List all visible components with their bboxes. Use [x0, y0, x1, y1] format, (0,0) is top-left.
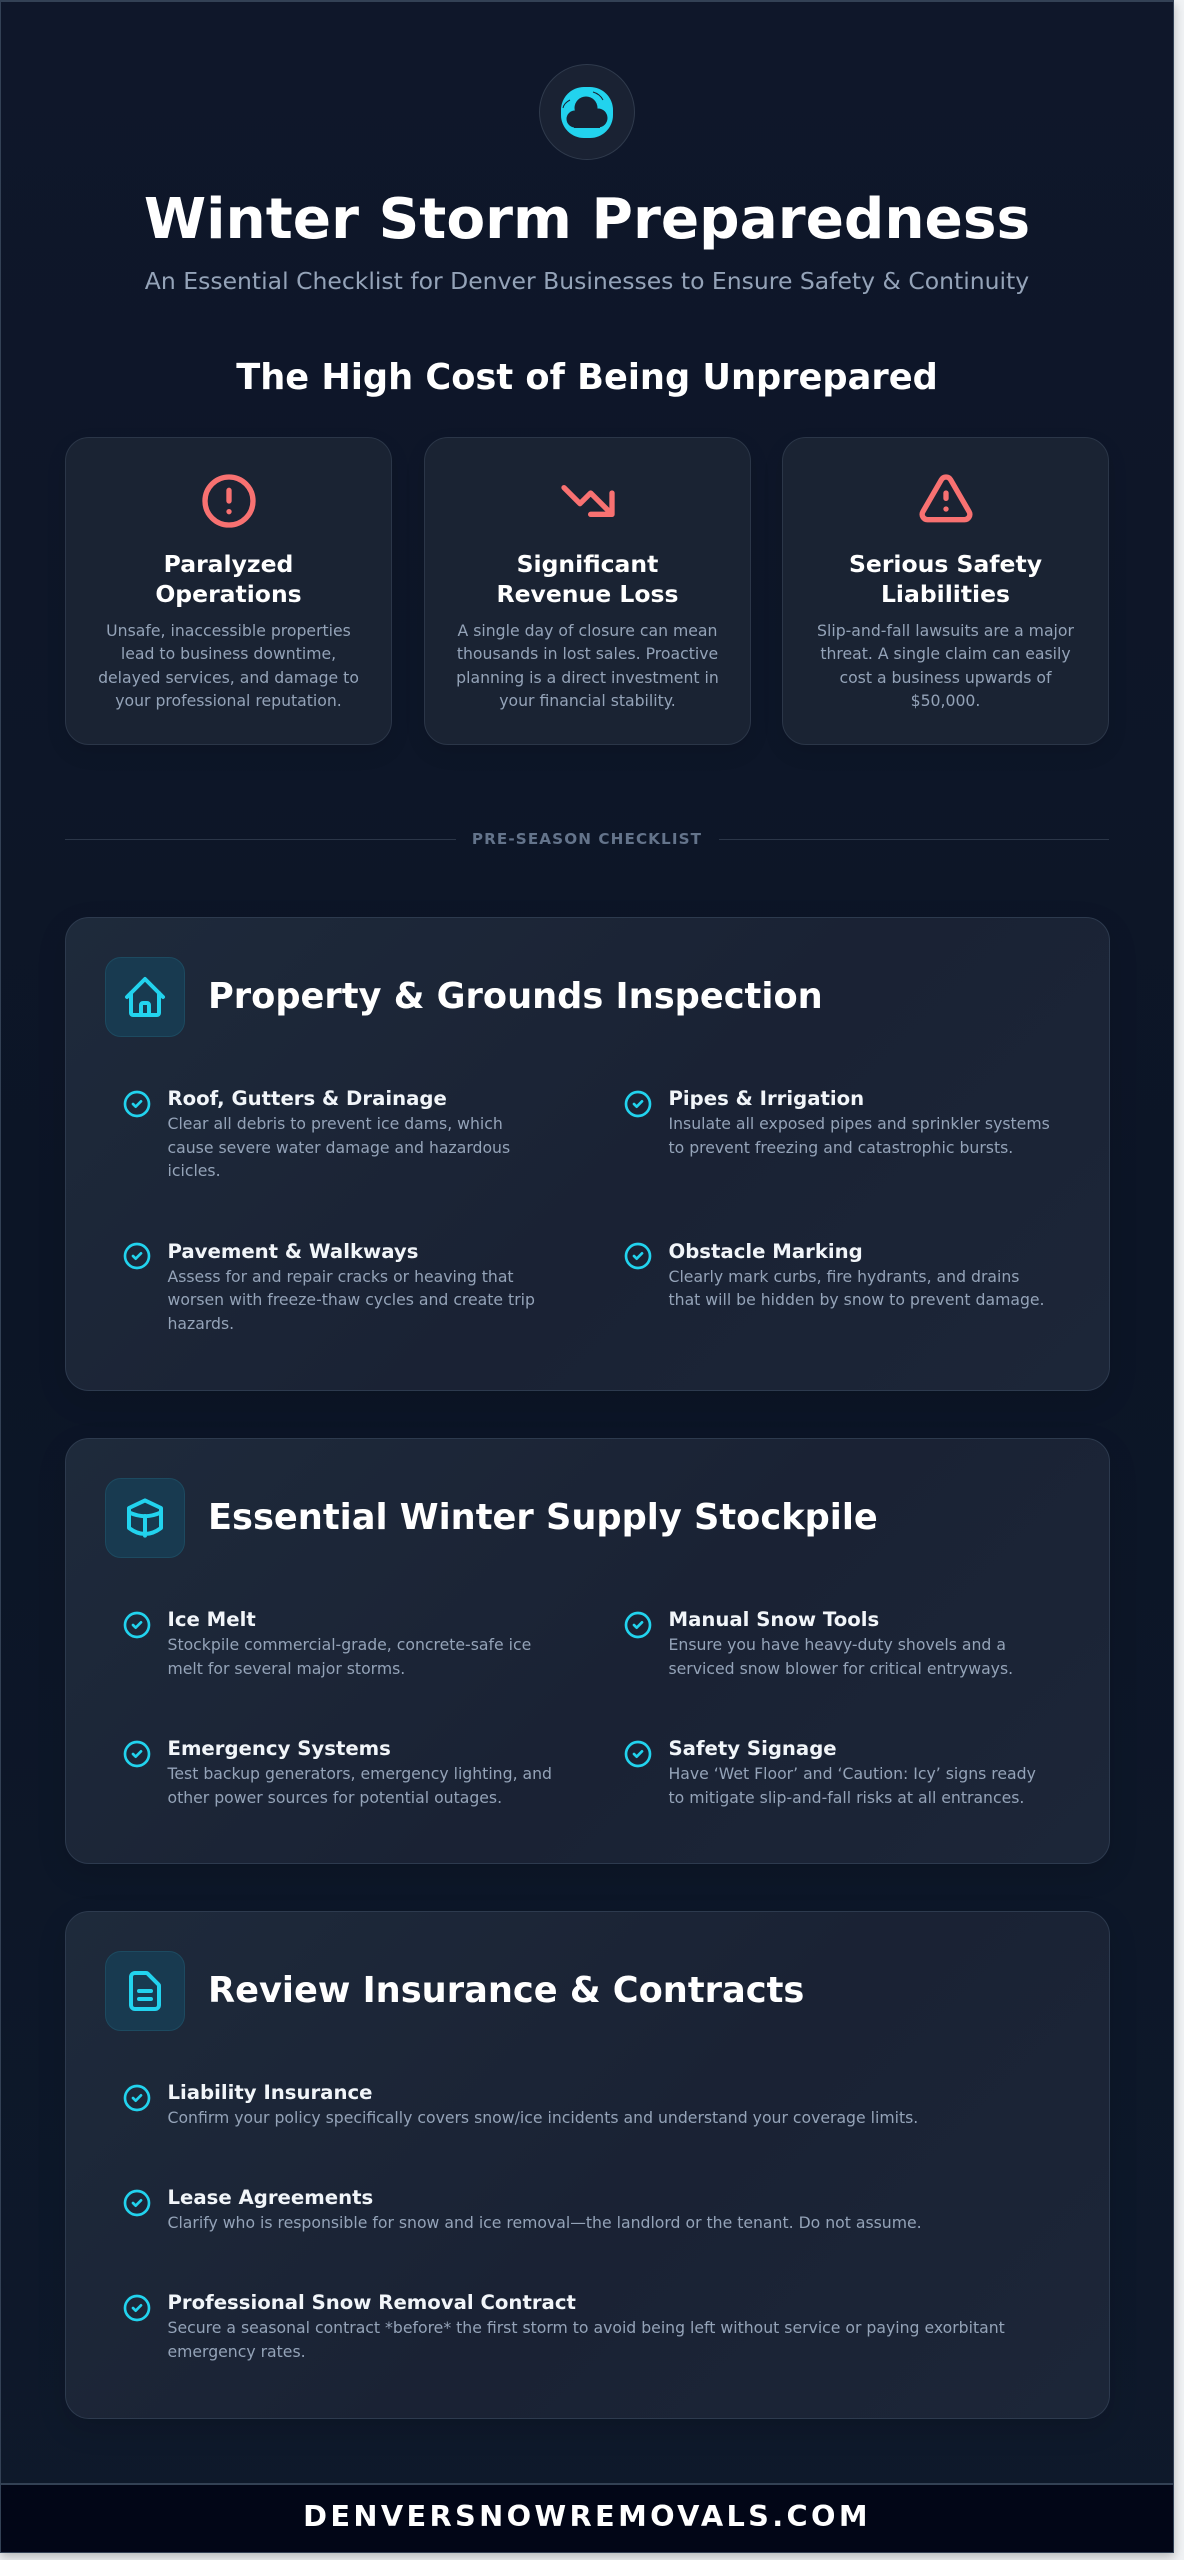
checklist item: Obstacle Marking — [668, 1240, 863, 1262]
checklist item: icicles. — [168, 1161, 221, 1180]
checklist item: that will be hidden by snow to prevent damage. — [668, 1290, 1045, 1309]
checklist item — [124, 2081, 918, 2127]
checklist item: Secure a seasonal contract *before* the first storm to avoid being left without service or paying exorbitant — [168, 2318, 1005, 2337]
card heading — [155, 550, 302, 608]
checklist item: melt for several major storms. — [168, 1659, 405, 1678]
checklist item — [624, 1608, 1013, 1678]
checklist item: cause severe water damage and hazardous — [168, 1138, 510, 1157]
card text: $50,000. — [911, 691, 980, 710]
icon: trending down — [561, 485, 615, 517]
checklist item: to prevent freezing and catastrophic bursts. — [668, 1138, 1013, 1157]
card text: planning is a direct investment in — [456, 668, 719, 687]
checklist item: Have ‘Wet Floor’ and ‘Caution: Icy’ signs ready — [668, 1764, 1036, 1783]
checklist item: Manual Snow Tools — [668, 1608, 879, 1631]
checklist item — [124, 2186, 922, 2232]
checklist item: Pipes & Irrigation — [668, 1087, 864, 1110]
checklist item: Safety Signage — [668, 1737, 837, 1760]
panel: safety liabilities — [782, 437, 1109, 745]
card heading: Operations — [155, 580, 302, 608]
checklist item: Emergency Systems — [168, 1737, 391, 1760]
checklist item: serviced snow blower for critical entryways. — [668, 1659, 1013, 1678]
card heading: Paralyzed — [164, 550, 293, 578]
card heading: Serious Safety — [849, 550, 1042, 578]
icon: document — [105, 1951, 185, 2031]
checklist item: Liability Insurance — [168, 2081, 372, 2104]
checklist item — [124, 2291, 1005, 2361]
icon: house — [105, 957, 185, 1037]
checklist item: Confirm your policy specifically covers snow/ice incidents and understand your coverage limits. — [168, 2108, 918, 2127]
card text: your financial stability. — [499, 691, 676, 710]
card text: A single day of closure can mean — [458, 620, 717, 640]
checklist item: Assess for and repair cracks or heaving that — [168, 1266, 514, 1286]
section label: pre-season checklist: PRE-SEASON CHECKLIST — [472, 830, 702, 848]
checklist item: to mitigate slip-and-fall risks at all entrances. — [668, 1788, 1024, 1807]
panel: property and grounds — [65, 917, 1110, 1391]
card text — [98, 620, 359, 710]
card heading: Revenue Loss — [497, 580, 678, 608]
footer bar — [0, 2483, 1174, 2553]
card text — [456, 620, 719, 710]
checklist item: Clear all debris to prevent ice dams, which — [168, 1114, 503, 1133]
card text: Slip-and-fall lawsuits are a major — [817, 620, 1074, 640]
checklist item: Test backup generators, emergency lighting, and — [168, 1764, 552, 1783]
card text: Unsafe, inaccessible properties — [106, 620, 351, 640]
checklist item: Pavement & Walkways — [168, 1240, 418, 1262]
checklist item: Insulate all exposed pipes and sprinkler systems — [668, 1114, 1050, 1133]
card text: lead to business downtime, — [121, 644, 336, 663]
checklist item — [624, 1240, 1045, 1309]
checklist item — [124, 1737, 552, 1807]
card heading: Significant — [517, 550, 658, 578]
checklist item: other power sources for potential outages. — [168, 1788, 502, 1807]
checklist item: Stockpile commercial-grade, concrete-safe ice — [168, 1635, 531, 1654]
panel: winter supply stockpile — [65, 1438, 1110, 1864]
checklist item: hazards. — [168, 1314, 234, 1333]
checklist item — [124, 1087, 510, 1180]
panel: paralyzed operations — [65, 437, 392, 745]
panel: revenue loss — [424, 437, 751, 745]
checklist item: Clearly mark curbs, fire hydrants, and drains — [668, 1266, 1019, 1286]
checklist item: Roof, Gutters & Drainage — [168, 1087, 447, 1110]
card text: delayed services, and damage to — [98, 668, 359, 687]
checklist item: worsen with freeze-thaw cycles and create trip — [168, 1290, 535, 1309]
card heading — [849, 550, 1042, 608]
checklist item — [624, 1087, 1050, 1157]
checklist item: Ensure you have heavy-duty shovels and a — [668, 1635, 1006, 1654]
icon: warning triangle — [919, 474, 973, 522]
checklist item: emergency rates. — [168, 2342, 306, 2361]
checklist item: Lease Agreements — [168, 2186, 373, 2209]
icon: exclamation circle — [202, 474, 256, 528]
checklist item — [624, 1737, 1036, 1807]
panel: insurance and contracts — [65, 1911, 1110, 2419]
checklist item — [124, 1608, 531, 1678]
icon: cloud badge — [539, 64, 635, 160]
card text — [817, 620, 1074, 710]
icon: box — [105, 1478, 185, 1558]
card heading — [497, 550, 678, 608]
checklist item: Professional Snow Removal Contract — [168, 2291, 576, 2314]
card text: thousands in lost sales. Proactive — [457, 644, 718, 663]
checklist item: Clarify who is responsible for snow and ice removal—the landlord or the tenant. Do not assume. — [168, 2213, 922, 2232]
heading: high cost: The High Cost of Being Unprepared — [236, 357, 938, 398]
card text: cost a business upwards of — [839, 668, 1052, 687]
panel heading: Review Insurance & Contracts — [208, 1970, 804, 2011]
subtitle: An Essential Checklist for Denver Businesses to Ensure Safety & Continuity — [145, 267, 1029, 295]
panel heading: Property & Grounds Inspection — [208, 976, 823, 1017]
card heading: Liabilities — [881, 580, 1010, 608]
title: Winter Storm Preparedness — [144, 187, 1030, 252]
panel heading: Essential Winter Supply Stockpile — [208, 1497, 878, 1538]
card text: threat. A single claim can easily — [820, 644, 1071, 663]
footer url: DENVERSNOWREMOVALS.COM — [303, 2499, 871, 2533]
checklist item — [124, 1240, 535, 1333]
checklist item: Ice Melt — [168, 1608, 256, 1631]
card text: your professional reputation. — [115, 691, 342, 710]
